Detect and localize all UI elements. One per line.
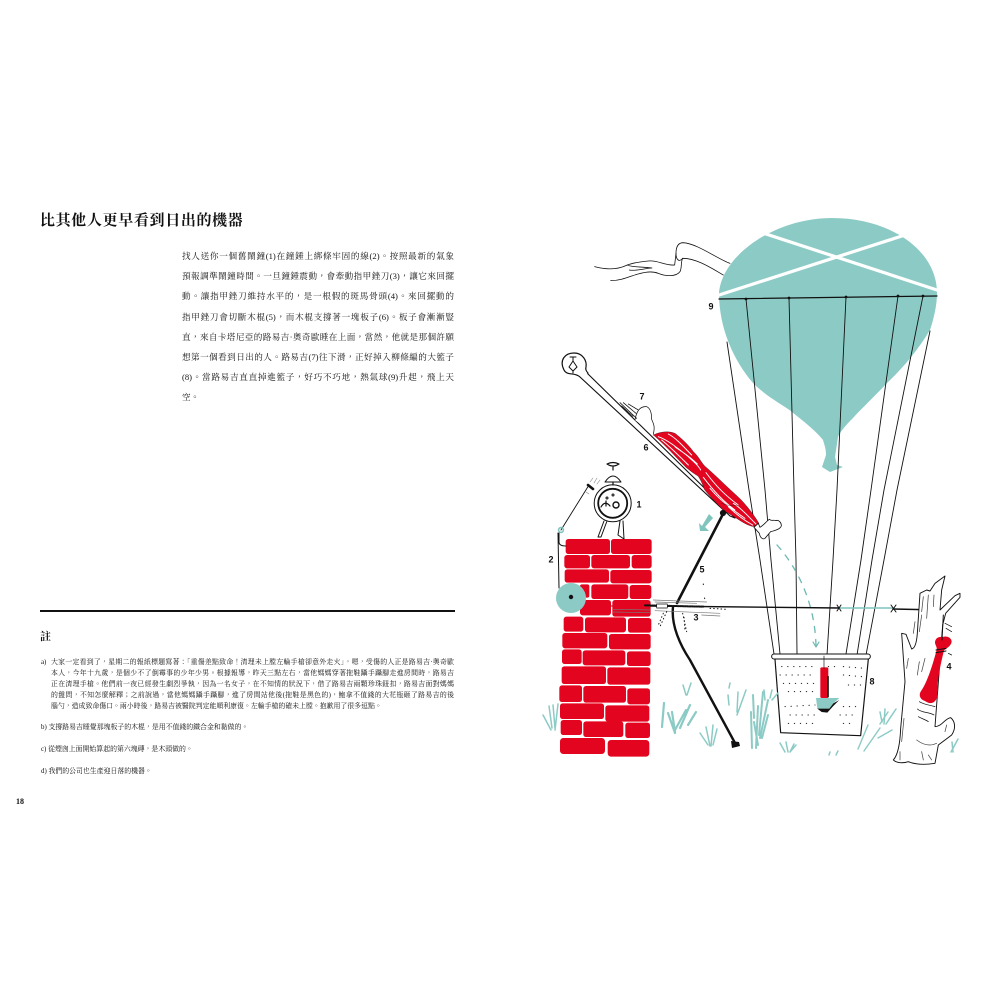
bark marks [900,595,947,760]
broken board in basket [816,698,839,709]
grass tufts [543,683,958,755]
bone tie [936,615,946,653]
footnote b: b) 支撐路易吉睡覺那塊板子的木棍，是用不值錢的鐵合金和黏做的。 [41,724,248,731]
body text block: 想第一個看到日出的人。路易吉(7)往下滑，正好掉入柳條編的大籃子 [182,352,454,362]
footnote a: 正在清理手槍。他們前一夜已經發生劇烈爭執，因為一名女子，在不知情的狀況下，借了路易吉兩顆珍珠鈕扣，路易吉面對媽媽 [51,681,454,688]
body text block: 找人送你一個舊鬧鐘(1)在鐘錘上綁條牢固的線(2)。按照最新的氣象 [182,251,454,261]
clock legs [598,521,624,539]
label 4: 4 [946,661,952,671]
label 7: 7 [639,391,645,401]
balloon [716,218,940,472]
label 9: 9 [708,301,714,311]
balloon streamer [595,243,730,281]
teal direction arrow [699,514,713,531]
footnote d: d) 我們的公司也生產迎日落的機器。 [41,768,152,775]
rope knots [745,295,924,300]
man hand [754,519,781,539]
sliding board [562,353,735,518]
footnote a: 腦勺，造成致命傷口。兩小時後，路易吉被醫院判定能順利康復。左輪手槍的確未上膛。抱歉用了很多逗點。 [51,703,382,710]
body text block: 預報調準鬧鐘時間。一旦鐘錘震動，會牽動指甲銼刀(3)，讓它來回擺 [182,271,454,281]
body text block: (8)。當路易吉直直掉進籃子，好巧不巧地，熱氣球(9)升起，飛上天 [182,372,454,382]
weight in basket [820,667,828,698]
body text block: 空。 [182,392,199,402]
footnote a [41,658,454,710]
title: 比其他人更早看到日出的機器 [40,213,243,229]
clock bell [605,476,621,482]
footnote c: c) 從煙囪上面開始算起的第六塊磚，是木頭做的。 [41,746,193,753]
brick chimney [559,539,652,757]
man body striped [653,432,759,527]
body text block: 直，來自卡塔尼亞的路易吉·奧奇歐睡在上面，當然，他就是那個許願 [182,332,454,342]
page number: 18 [16,797,24,806]
body text block: 指甲銼刀會切斷木棍(5)，而木棍支撐著一塊板子(6)。板子會漸漸豎 [182,312,454,322]
footnote a: 大家一定看到了，星期二的報紙標題寫著：「重傷差點致命！清理未上膛左輪手槍卻意外走火」，嗯，受傷的人正是路易吉·奧奇歐 [51,659,454,666]
wooden strut [673,510,740,748]
balloon load ring [719,296,937,299]
basket speckles [780,667,865,723]
alarm clock [586,462,631,539]
nail file friction marks [613,584,727,632]
body text block [182,251,454,402]
clock hammer [588,485,593,489]
label 8: 8 [869,676,875,686]
notes heading: 註 [40,631,51,643]
wicker basket [772,654,870,736]
clock face [594,485,631,522]
label 1: 1 [636,499,642,509]
basket body [775,659,868,736]
footnote a: 本人，今年十九歲，是個少不了倒霉事的少年少男。根據報導，昨天三點左右，當他媽媽穿著拖鞋躡手躡腳走進房間時，路易吉 [51,670,454,677]
sleeping man [620,403,781,539]
dead tree [893,576,960,764]
body text block: 動。讓指甲銼刀維持水平的，是一根假的斑馬骨頭(4)。來回擺動的 [182,291,454,301]
man head [635,407,654,434]
balloon white bands [716,232,940,296]
footnote a: a) [41,659,46,666]
pulley wheel [556,583,586,613]
label 2: 2 [548,554,554,564]
horizontal trigger cord [583,605,940,612]
zebra bone [920,637,952,703]
notes divider rule [40,610,455,612]
label 3: 3 [693,612,699,622]
label 6: 6 [643,442,649,452]
footnote a: 的盤問，不知怎麼解釋；之前說過，當他媽媽躡手躡腳，進了房間站他後(拖鞋是黑色的)，鮑拿不值錢的大花瓶砸了路易吉的後 [51,692,454,699]
teal dashed falling path [777,545,819,647]
basket rim [772,654,870,659]
balloon ropes [727,296,930,655]
label 5: 5 [699,564,705,574]
man hair [620,403,638,418]
tree trunk [893,576,960,764]
balloon envelope [719,218,937,472]
string from hammer to wheel [558,485,589,588]
